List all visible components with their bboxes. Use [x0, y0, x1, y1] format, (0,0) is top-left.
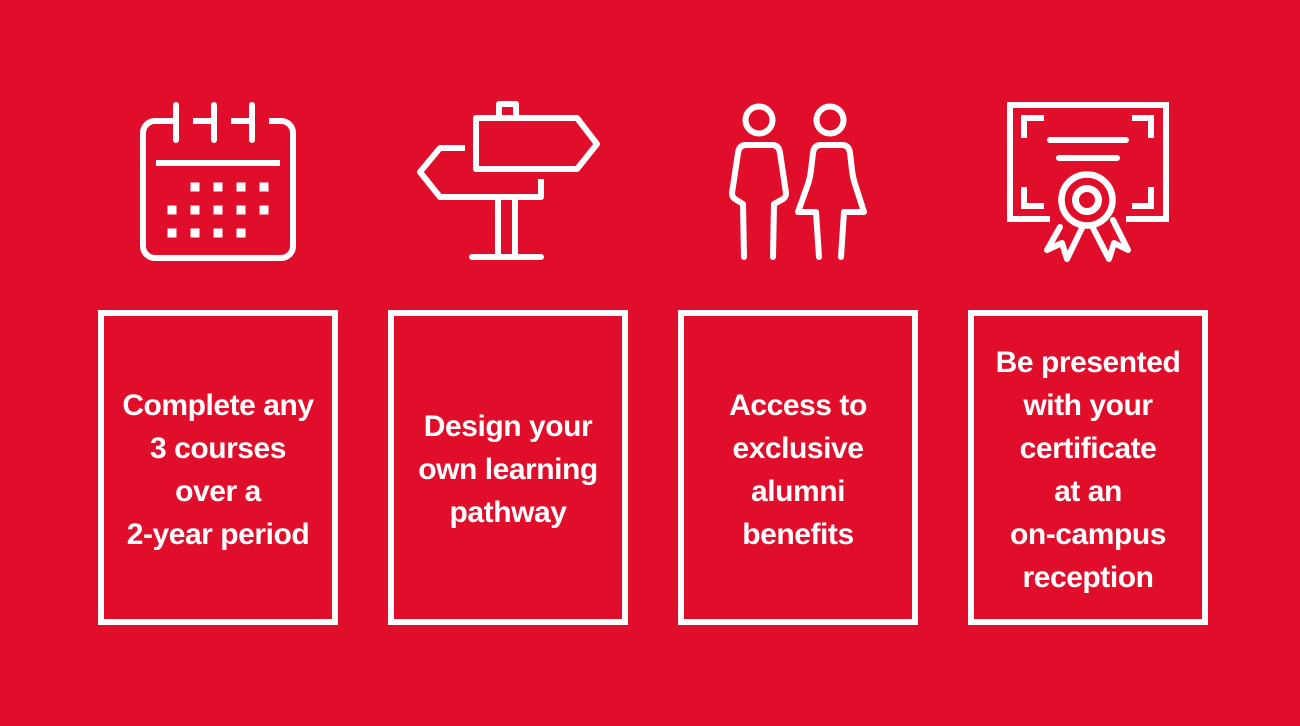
panel: design your own learning pathway: pathway: [450, 496, 566, 529]
panel: complete any 3 courses: [98, 310, 338, 625]
panel: be presented with your certificate: reception: [1022, 560, 1153, 594]
panel: be presented with your certificate: [968, 310, 1208, 625]
panel: access to exclusive alumni benefits: Access to: [729, 388, 867, 422]
panel: design your own learning pathway: Design your: [424, 410, 592, 443]
panel: design your own learning pathway: own learning: [418, 453, 598, 486]
panel: access to exclusive alumni benefits: benefits: [742, 518, 854, 550]
panel: be presented with your certificate: with your: [1023, 388, 1153, 422]
panel: complete any 3 courses: over a: [175, 474, 261, 508]
panel: complete any 3 courses: Complete any: [122, 388, 314, 422]
icons row: [140, 101, 1169, 262]
panel: be presented with your certificate: Be presented: [996, 346, 1180, 378]
icon: certificate: [1010, 105, 1166, 259]
panel: be presented with your certificate: at an: [1054, 474, 1122, 508]
icon: signpost: [420, 104, 597, 257]
panel: complete any 3 courses: 3 courses: [150, 432, 286, 464]
icon: two people: [732, 106, 864, 257]
icon: calendar: [143, 105, 293, 258]
panel: complete any 3 courses: 2-year period: [127, 518, 309, 550]
panel: design your own learning pathway: [388, 310, 628, 625]
panel: be presented with your certificate: on-campus: [1010, 518, 1166, 550]
panel: be presented with your certificate: certificate: [1020, 432, 1156, 464]
panel: access to exclusive alumni benefits: [678, 310, 918, 625]
panel: access to exclusive alumni benefits: exclusive: [732, 432, 864, 464]
panel: access to exclusive alumni benefits: alumni: [751, 474, 845, 508]
